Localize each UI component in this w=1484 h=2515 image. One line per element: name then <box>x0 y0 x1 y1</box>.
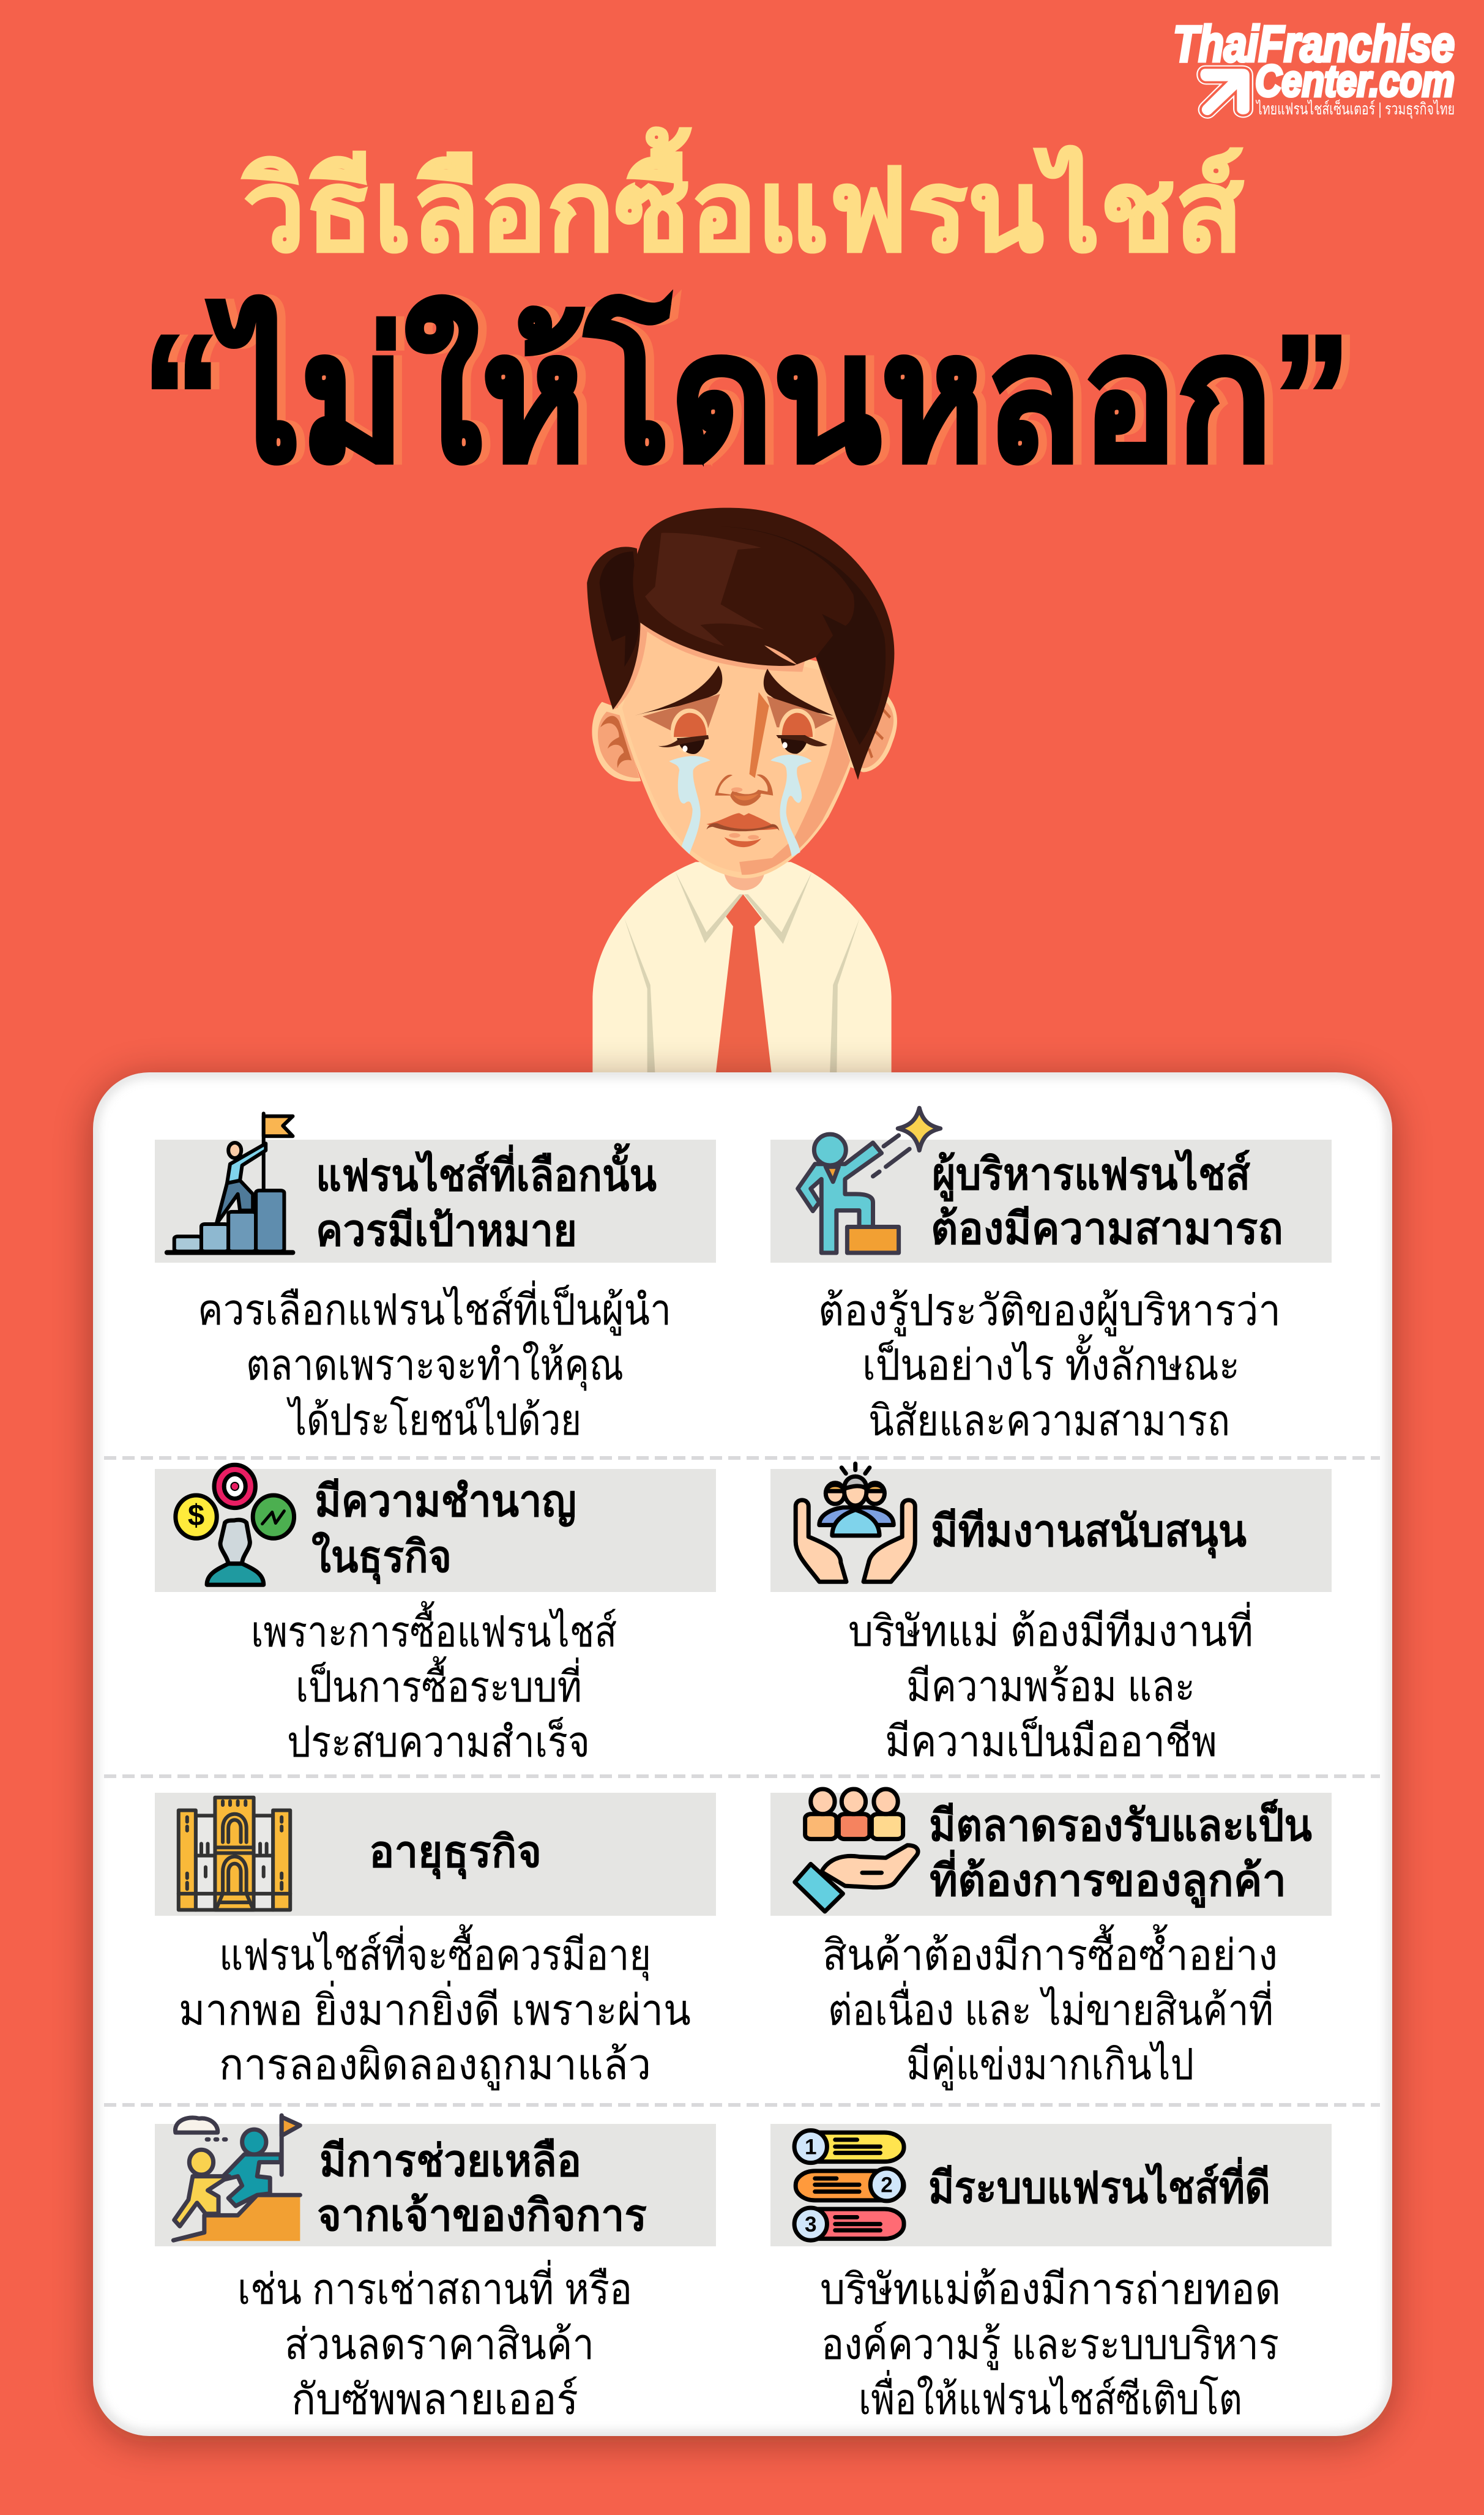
icon: numbered list: 3 <box>805 2213 817 2237</box>
icon: numbered list <box>794 2131 904 2240</box>
heading: อายุธุรกิจ <box>369 1828 542 1880</box>
dashed dividers <box>104 1458 1380 2105</box>
heading: มีความชำนาญ <box>315 1477 576 1527</box>
icon: castle <box>179 1798 290 1910</box>
heading: ผู้บริหารแฟรนไชส์ <box>932 1148 1250 1202</box>
icon: hands holding team <box>796 1463 915 1582</box>
section 2: management ability <box>770 1108 1332 1444</box>
section 8: good system: องค์ความรู้ และระบบบริหาร <box>821 2320 1279 2371</box>
heading: มีทีมงานสนับสนุน <box>931 1507 1247 1559</box>
neck <box>724 870 765 890</box>
left ear <box>592 702 641 782</box>
nose <box>749 692 769 778</box>
body text: ควรเลือกแฟรนไชส์ที่เป็นผู้นำ <box>198 1280 671 1336</box>
section 4: support team: มีความพร้อม และ <box>906 1662 1195 1710</box>
eye sockets <box>643 694 835 731</box>
logo: ThaiFranchise Center.com <box>1173 15 1455 119</box>
mouth <box>707 813 778 830</box>
section 5: business age: มากพอ ยิ่งมากยิ่งดี เพราะผ่าน <box>179 1981 691 2034</box>
icon: hand with customers <box>795 1789 918 1911</box>
title line 1: วิธีเลือกซื้อแฟรนไชส์ <box>242 127 1244 275</box>
panel shadow <box>93 1078 1392 2442</box>
body text: แฟรนไชส์ที่จะซื้อควรมีอายุ <box>219 1924 651 1981</box>
header bar <box>770 1140 1332 1263</box>
right eye <box>779 709 815 754</box>
section 5: business age <box>155 1793 716 2091</box>
section 1: goal: ได้ประโยชน์ไปด้วย <box>286 1396 581 1444</box>
right ear <box>849 694 897 772</box>
icon: reaching for a star <box>798 1108 941 1253</box>
tie <box>716 894 772 1073</box>
section 8: good system: เพื่อให้แฟรนไชส์ซีเติบโต <box>859 2370 1242 2423</box>
tears <box>669 755 812 857</box>
section 2: management ability: ต้องมีความสามารถ <box>931 1205 1283 1254</box>
section 4: support team: มีความเป็นมืออาชีพ <box>885 1716 1217 1765</box>
heading: มีตลาดรองรับและเป็น <box>929 1799 1312 1850</box>
section 7: owner support: ส่วนลดราคาสินค้า <box>285 2320 594 2368</box>
section 8: good system <box>770 2124 1332 2423</box>
heading: มีระบบแฟรนไชส์ที่ดี <box>928 2156 1270 2213</box>
section 3: expertise <box>155 1465 716 1766</box>
body text: เช่น การเช่าสถานที่ หรือ <box>237 2260 632 2313</box>
icon: expert with target and coins: $ <box>188 1499 204 1532</box>
body text: บริษัทแม่ ต้องมีทีมงานที่ <box>848 1602 1253 1655</box>
section 5: business age: การลองผิดลองถูกมาแล้ว <box>219 2041 651 2091</box>
heading: มีการช่วยเหลือ <box>319 2137 581 2186</box>
title line 2: “ไม่ให้โดนหลอก” <box>142 292 1351 498</box>
header bar <box>155 1793 716 1916</box>
shirt <box>592 862 892 1073</box>
main hair <box>633 508 894 780</box>
section 1: goal: ตลาดเพราะจะทำให้คุณ <box>246 1340 624 1391</box>
icon: climber with flag on bars <box>167 1113 293 1252</box>
illustration: crying man <box>587 508 897 1073</box>
section 3: expertise: ประสบความสำเร็จ <box>287 1717 590 1766</box>
body text: เพราะการซื้อแฟรนไชส์ <box>251 1601 617 1656</box>
collar <box>676 872 812 944</box>
section 6: market demand: มีคู่แข่งมากเกินไป <box>906 2041 1194 2091</box>
section 1: goal: ควรมีเป้าหมาย <box>316 1206 577 1255</box>
section 3: expertise: ในธุรกิจ <box>311 1531 452 1585</box>
section 2: management ability: เป็นอย่างไร ทั้งลักษณะ <box>862 1334 1240 1389</box>
face <box>617 622 853 878</box>
body text: สินค้าต้องมีการซื้อซ้ำอย่าง <box>822 1924 1278 1979</box>
section 3: expertise: เป็นการซื้อระบบที่ <box>296 1656 582 1711</box>
icon: numbered list: 1 <box>805 2135 817 2159</box>
heading: แฟรนไชส์ที่เลือกนั้น <box>316 1143 657 1200</box>
section 2: management ability: นิสัยและความสามารถ <box>868 1397 1230 1444</box>
section 4: support team <box>770 1463 1332 1765</box>
header bar <box>155 1469 716 1592</box>
section 6: market demand: ต่อเนื่อง และ ไม่ขายสินค้าที่ <box>828 1981 1273 2034</box>
header bar <box>155 1140 716 1263</box>
left eye <box>671 709 708 754</box>
header bar <box>155 2124 716 2246</box>
header bar <box>770 1793 1332 1916</box>
icon: numbered list: 2 <box>881 2173 893 2197</box>
header bar <box>770 1469 1332 1592</box>
body text: ต้องรู้ประวัติของผู้บริหารว่า <box>818 1287 1281 1337</box>
icon: expert with target and coins <box>176 1465 294 1585</box>
header bar <box>770 2124 1332 2246</box>
section 7: owner support <box>155 2115 716 2423</box>
body text: บริษัทแม่ต้องมีการถ่ายทอด <box>820 2265 1281 2313</box>
section 7: owner support: กับซัพพลายเออร์ <box>291 2375 578 2423</box>
title line 2: “ไม่ให้โดนหลอก” <box>151 292 1360 498</box>
section 1: goal <box>155 1113 716 1444</box>
panel: white card <box>93 1072 1392 2436</box>
section 6: market demand <box>770 1789 1332 2091</box>
section 6: market demand: ที่ต้องการของลูกค้า <box>930 1849 1286 1908</box>
icon: helping climber <box>173 2115 300 2241</box>
eyebrows <box>635 665 833 716</box>
section 7: owner support: จากเจ้าของกิจการ <box>317 2191 647 2240</box>
back hair <box>587 547 640 709</box>
